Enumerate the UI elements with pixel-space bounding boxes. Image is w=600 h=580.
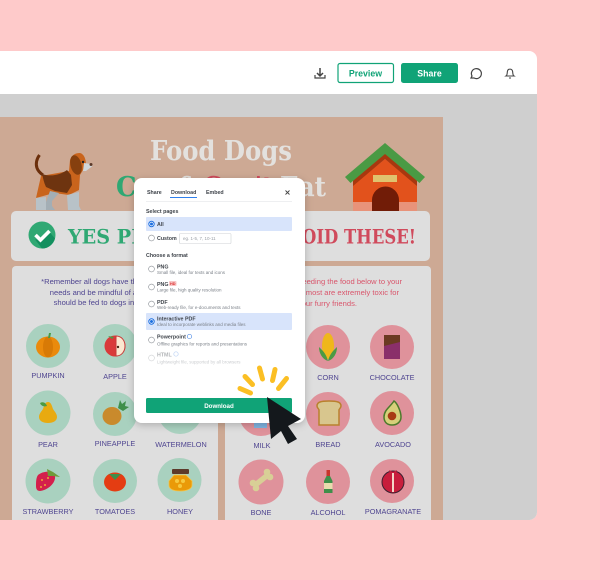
option: PNG: PNG xyxy=(157,264,168,270)
sparkle accent xyxy=(240,368,286,393)
option: Interactive PDF: Interactive PDF xyxy=(157,316,196,322)
option: PDF: Web-ready file, for e-documents and texts xyxy=(157,305,241,310)
icon: honey xyxy=(169,469,192,491)
icon: watermelon xyxy=(170,410,191,418)
warning text xyxy=(305,278,402,308)
icon: strawberry xyxy=(36,469,60,491)
dialog tabs: Share xyxy=(147,190,162,196)
icon: bone xyxy=(250,469,273,491)
share button: Share xyxy=(417,68,442,78)
option: PNG HD: Large file, high quality resolution xyxy=(157,288,222,292)
select pages: All xyxy=(157,222,164,228)
preview button: Preview xyxy=(349,68,382,78)
title: & xyxy=(178,172,197,203)
food labels: APPLE xyxy=(103,372,127,381)
icon: bread xyxy=(317,401,341,425)
preview button xyxy=(338,64,394,82)
format options xyxy=(146,253,292,364)
option: PDF xyxy=(149,300,241,310)
warning text: our furry friends. xyxy=(302,299,357,308)
editor window xyxy=(0,51,537,526)
option: PNG HD: HD xyxy=(170,282,176,286)
share button xyxy=(401,63,458,83)
option: Powerpoint: Powerpoint xyxy=(157,334,186,340)
option: PNG xyxy=(149,264,226,275)
option: Powerpoint xyxy=(149,334,248,346)
food labels: PINEAPPLE xyxy=(95,439,135,448)
food labels: AVOCADO xyxy=(375,440,411,449)
icon: apple xyxy=(104,336,126,356)
dialog tabs: Download xyxy=(171,190,196,196)
food labels: ALCOHOL xyxy=(311,508,345,517)
illustration: dog house xyxy=(345,143,425,212)
food labels: CORN xyxy=(317,373,339,382)
icon: check xyxy=(28,222,56,248)
icon: chocolate xyxy=(384,335,400,359)
banner xyxy=(11,211,430,261)
option: PNG HD: PNG xyxy=(157,282,168,288)
infographic poster xyxy=(0,117,443,526)
option: Interactive PDF: Ideal to incorporate weblinks and media files xyxy=(157,322,246,327)
intro text xyxy=(41,278,134,306)
icon: milk xyxy=(254,423,267,428)
illustration: beagle dog xyxy=(36,153,92,210)
icon: comment xyxy=(471,69,481,79)
dialog tabs xyxy=(146,190,292,202)
option: Powerpoint: Offline graphics for reports and presentations xyxy=(157,342,248,346)
food labels: PUMPKIN xyxy=(31,371,65,380)
select pages xyxy=(146,209,292,244)
food labels xyxy=(251,373,421,517)
icon: alcohol xyxy=(324,470,332,493)
warning text: dogs, as most are extremely toxic for xyxy=(275,288,399,297)
food labels: HONEY xyxy=(167,507,193,516)
option: HTML: Lightweight file, supported by all browsers xyxy=(157,360,241,364)
food labels: CHOCOLATE xyxy=(370,373,415,382)
toolbar xyxy=(315,63,514,83)
banner: YES PLEASE! xyxy=(67,224,211,248)
intro text: should be fed to dogs in moderation. xyxy=(54,298,176,307)
select pages: Custom xyxy=(157,236,177,242)
title: Eat xyxy=(280,172,326,203)
food labels: BONE xyxy=(251,508,271,517)
option: HTML xyxy=(149,352,241,364)
intro text: *Remember all dogs have their own specific xyxy=(41,277,189,286)
food labels: STRAWBERRY xyxy=(22,507,74,516)
icon: pumpkin xyxy=(36,333,60,358)
warning text: Avoid feeding the food below to your xyxy=(279,277,402,286)
icon: tomato xyxy=(104,472,126,492)
format options: Choose a format xyxy=(146,253,188,259)
title xyxy=(117,140,326,196)
panel: safe foods xyxy=(12,266,218,526)
icon: pear xyxy=(39,402,57,423)
food labels: POMAGRANATE xyxy=(365,507,421,516)
download button: Download xyxy=(204,403,234,410)
food labels: MILK xyxy=(253,441,271,450)
cursor arrow xyxy=(267,397,301,444)
dialog tabs: Embed xyxy=(206,190,224,196)
download dialog xyxy=(134,178,305,423)
select pages: Select pages xyxy=(146,209,178,215)
option: PNG: Small file, ideal for texts and icons xyxy=(157,270,226,275)
food labels xyxy=(22,371,207,516)
food labels: PEAR xyxy=(38,440,58,449)
download button xyxy=(146,398,292,413)
icon: bell xyxy=(506,69,514,78)
panel: unsafe foods xyxy=(225,266,431,526)
icon: avocado xyxy=(384,401,401,425)
title: Can't xyxy=(203,172,273,203)
banner: AVOID THESE! xyxy=(277,224,416,248)
select pages: eg. 1-5, 7, 10-11 xyxy=(183,236,216,241)
option: PNG HD xyxy=(149,281,222,292)
intro text: needs and be mindful of allergies, food xyxy=(50,288,180,297)
icon: corn xyxy=(319,333,337,361)
food labels: TOMATOES xyxy=(95,507,135,516)
option: PDF: PDF xyxy=(157,300,168,306)
title: Food Dogs xyxy=(150,136,292,167)
option: Interactive PDF xyxy=(146,313,292,330)
food labels: BREAD xyxy=(315,440,341,449)
food labels: WATERMELON xyxy=(155,440,207,449)
option: HTML: HTML xyxy=(157,352,172,358)
icon: pomegranate xyxy=(382,470,404,493)
icon: pineapple xyxy=(102,400,129,425)
icon: download xyxy=(315,68,325,78)
title: Can xyxy=(116,172,172,203)
